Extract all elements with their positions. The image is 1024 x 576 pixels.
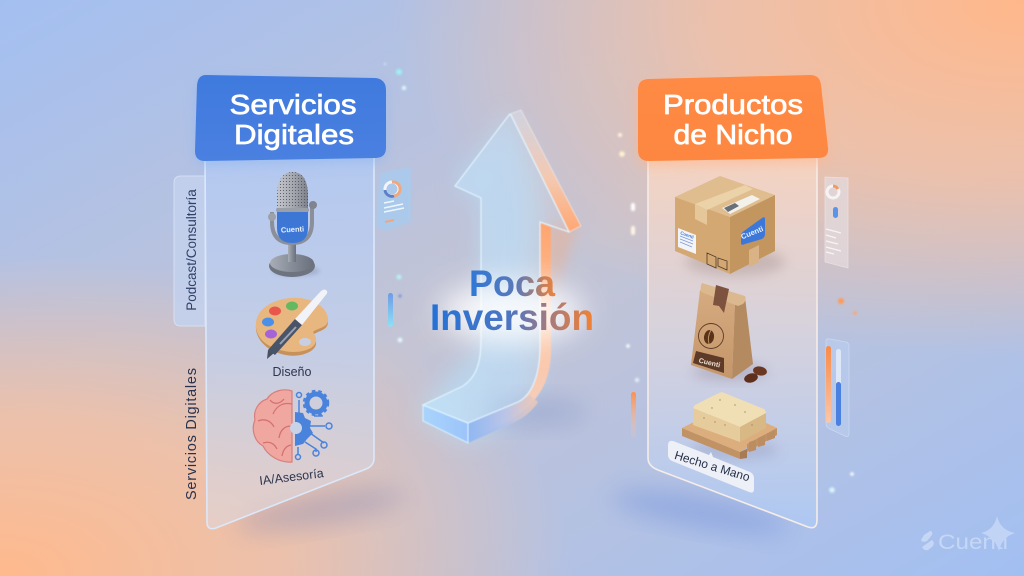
icon: brain and circuit xyxy=(253,390,332,462)
arrow orange glow xyxy=(545,225,578,300)
header: productos de nicho: Productos xyxy=(663,89,803,120)
label: diseno: Diseño xyxy=(273,365,311,379)
arrow xyxy=(423,110,587,443)
header: servicios digitales: Servicios xyxy=(230,89,356,120)
label tag: hecho a mano: Hecho a Mano xyxy=(673,448,752,484)
label: ia asesoria: IA/Asesoría xyxy=(259,466,324,488)
icon: microphone xyxy=(268,172,320,277)
heading glow xyxy=(440,282,584,342)
floating card: donut left xyxy=(376,167,411,231)
sparkles left xyxy=(384,63,406,342)
label tag: hecho a mano xyxy=(668,441,754,493)
icon: cardboard box xyxy=(675,176,785,276)
header: productos de nicho: de Nicho xyxy=(674,119,792,150)
arrow shadow xyxy=(483,398,587,426)
header: productos de nicho xyxy=(638,75,828,166)
glass panel xyxy=(205,155,374,529)
logo: cuenti watermark xyxy=(921,516,1015,554)
arrow glow xyxy=(423,112,540,443)
icon: soap on dish xyxy=(682,392,779,459)
panel: productos de nicho xyxy=(609,75,828,542)
icon: coffee bag: Cuenti xyxy=(698,358,721,369)
side label: servicios digitales: Servicios Digitales xyxy=(184,368,200,500)
icon: cardboard box: Cuenti xyxy=(740,224,765,241)
logo: cuenti watermark: Cuenti xyxy=(938,531,1008,554)
panel shadow xyxy=(609,482,791,542)
floating bar left xyxy=(388,293,393,327)
icon: coffee bag xyxy=(691,283,768,384)
icon: microphone: Cuenti xyxy=(281,224,304,235)
side tab: podcast consultoria xyxy=(174,176,205,326)
sparkles right xyxy=(618,133,857,493)
floating bar card right xyxy=(826,339,849,437)
panel: servicios digitales xyxy=(174,75,406,540)
side tab: podcast consultoria: Podcast/Consultoría xyxy=(184,189,199,311)
floating card: donut right xyxy=(825,177,848,268)
floating bar lower-left of right panel xyxy=(631,392,636,438)
glass panel xyxy=(648,155,817,528)
heading: poca inversion xyxy=(430,263,594,338)
header: servicios digitales: Digitales xyxy=(234,119,354,150)
panel shadow xyxy=(234,480,406,540)
icon: cardboard box: Cuenti xyxy=(680,230,695,240)
header: servicios digitales xyxy=(195,75,386,165)
icon: palette xyxy=(256,290,328,359)
heading: poca inversion: Inversión xyxy=(430,297,594,338)
heading: poca inversion: Poca xyxy=(469,263,555,304)
